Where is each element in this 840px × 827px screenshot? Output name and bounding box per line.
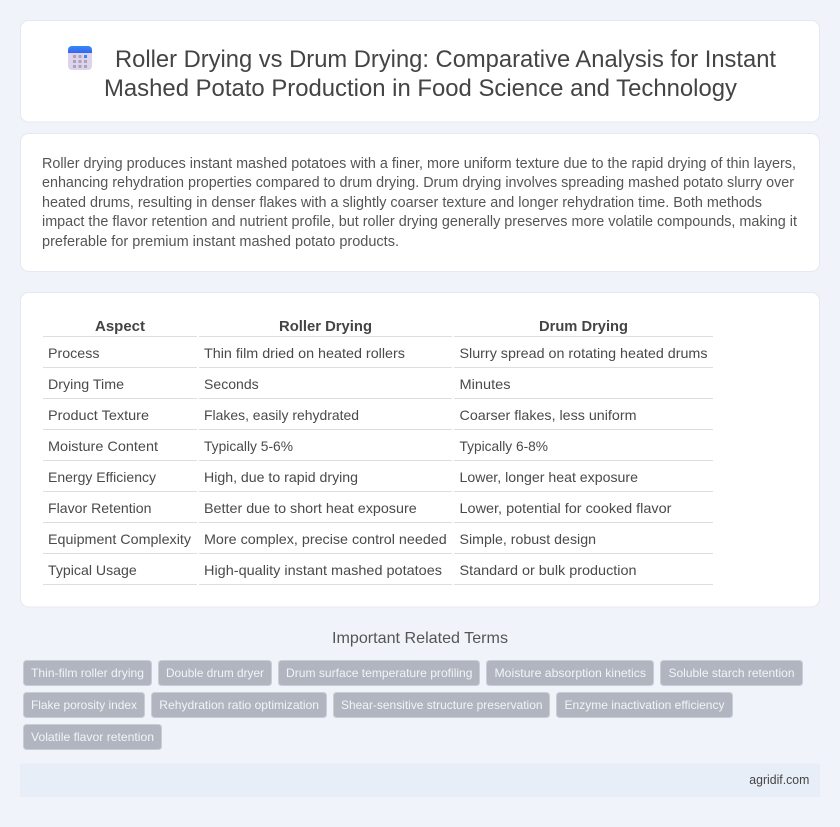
title text: Roller Drying vs Drum Drying: Comparative Analysis for Instant [115, 46, 776, 73]
row: flavor retention: Flavor Retention [48, 500, 152, 516]
row: energy efficiency: Energy Efficiency [48, 469, 156, 485]
row: moisture content: Typically 5-6% [204, 438, 293, 454]
row: equipment complexity: Simple, robust design [460, 531, 596, 547]
summary text: heated drums, resulting in denser flakes with a slightly coarser texture and longer rehydration time. Both methods [42, 195, 762, 211]
row: energy efficiency [48, 469, 638, 485]
row: moisture content: Typically 6-8% [460, 438, 548, 454]
row: product texture: Product Texture [48, 407, 149, 423]
row: flavor retention: Lower, potential for cooked flavor [460, 500, 672, 516]
tag [334, 692, 550, 718]
row: product texture: Flakes, easily rehydrated [204, 407, 359, 423]
table header: Drum Drying [539, 318, 628, 335]
row: energy efficiency: Lower, longer heat exposure [460, 469, 638, 485]
summary text: impact the flavor retention and nutrient profile, but roller drying generally preserves more volatile compounds, making it [42, 214, 797, 230]
row: product texture: Coarser flakes, less uniform [460, 407, 636, 423]
row: typical usage: Typical Usage [48, 562, 137, 578]
tag [152, 692, 326, 718]
related term tags [24, 660, 802, 750]
tag [24, 660, 152, 686]
row: energy efficiency: High, due to rapid drying [204, 469, 358, 485]
row: flavor retention [48, 500, 672, 516]
table header [95, 318, 628, 335]
footer [20, 764, 820, 797]
row: typical usage: High-quality instant mashed potatoes [204, 562, 442, 578]
row: moisture content [48, 438, 548, 454]
tag: Moisture absorption kinetics [494, 666, 646, 680]
row: equipment complexity: Equipment Complexity [48, 531, 191, 547]
tag [158, 660, 272, 686]
row: process: Slurry spread on rotating heated drums [460, 345, 708, 361]
panel: summary paragraph [20, 134, 820, 272]
panel: title [20, 20, 820, 122]
footer source: agridif.com [749, 773, 809, 787]
tag [660, 660, 802, 686]
row: drying time [48, 376, 510, 392]
row: drying time: Drying Time [48, 376, 124, 392]
tag: Volatile flavor retention [31, 730, 154, 744]
tag: Thin-film roller drying [31, 666, 144, 680]
tag [24, 692, 144, 718]
tag [556, 692, 732, 718]
row: process: Process [48, 345, 100, 361]
tag [486, 660, 654, 686]
tag: Enzyme inactivation efficiency [564, 698, 724, 712]
row: equipment complexity [48, 531, 596, 547]
title text: Mashed Potato Production in Food Science and Technology [104, 75, 738, 102]
icon: calendar [68, 46, 92, 70]
summary text: enhancing rehydration properties compared to drum drying. Drum drying involves spreading mashed potato slurry over [42, 175, 794, 191]
row: drying time: Minutes [460, 376, 510, 392]
row: typical usage: Standard or bulk production [460, 562, 636, 578]
row: equipment complexity: More complex, precise control needed [204, 531, 447, 547]
row: drying time: Seconds [204, 376, 259, 392]
tag: Double drum dryer [166, 666, 264, 680]
summary text [42, 156, 797, 250]
table header: Roller Drying [279, 318, 372, 335]
summary text: Roller drying produces instant mashed potatoes with a finer, more uniform texture due to the rapid drying of thin layers, [42, 156, 796, 172]
tag [24, 724, 162, 750]
tag: Soluble starch retention [668, 666, 794, 680]
title text [104, 46, 776, 102]
row: process: Thin film dried on heated rollers [204, 345, 405, 361]
row: process [48, 345, 708, 361]
tag: Rehydration ratio optimization [159, 698, 319, 712]
row: moisture content: Moisture Content [48, 438, 158, 454]
row: typical usage [48, 562, 636, 578]
tag [278, 660, 480, 686]
tag: Flake porosity index [31, 698, 137, 712]
row: product texture [48, 407, 636, 423]
row: flavor retention: Better due to short heat exposure [204, 500, 417, 516]
summary text: preferable for premium instant mashed potato products. [42, 234, 399, 250]
tag: Drum surface temperature profiling [286, 666, 472, 680]
tag: Shear-sensitive structure preservation [341, 698, 542, 712]
heading: important related terms: Important Related Terms [332, 630, 508, 647]
panel: comparison table [20, 292, 820, 607]
table header: Aspect [95, 318, 145, 335]
